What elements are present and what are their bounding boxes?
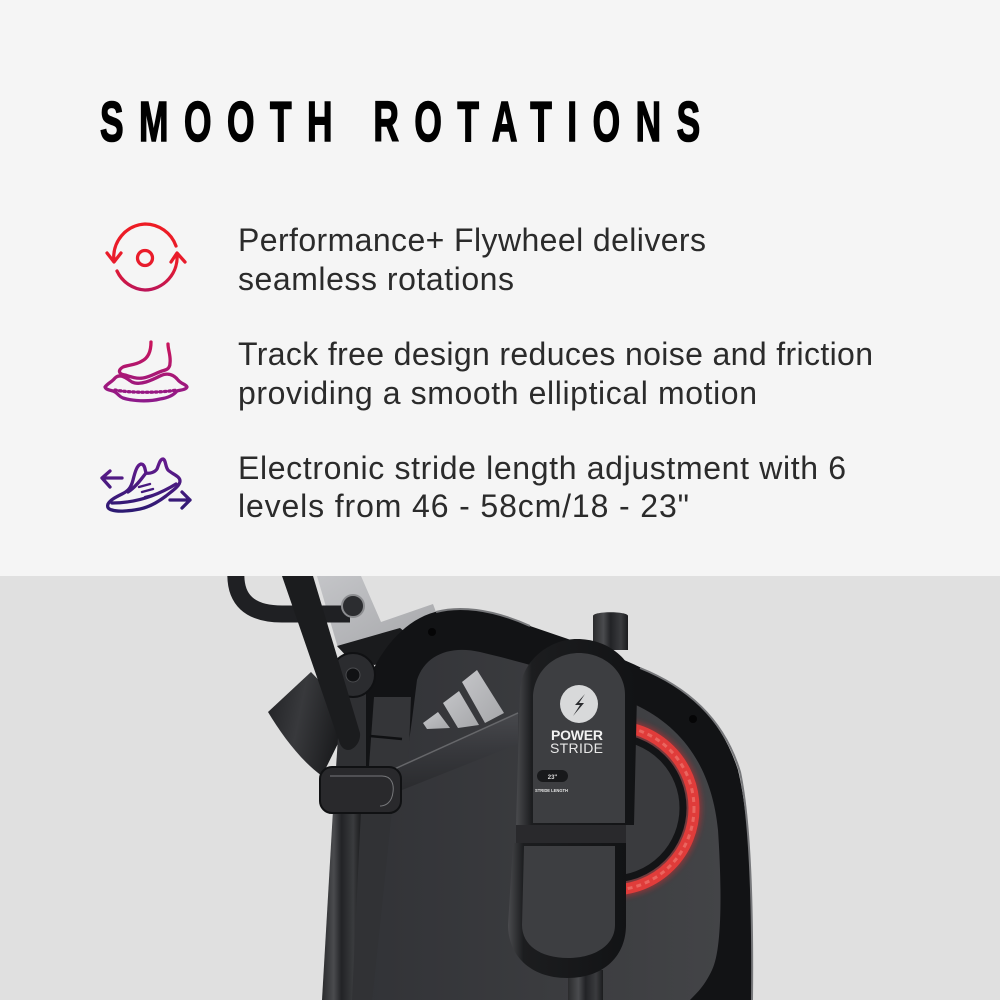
background: lower product panel (0, 576, 1000, 1000)
lower pod shell (508, 843, 626, 978)
arm joint (320, 767, 401, 813)
cup holder (268, 672, 338, 774)
power label: POWER (551, 727, 603, 743)
lower stem (568, 970, 603, 1000)
bracket lower shadow edge (337, 628, 403, 665)
text: stride length feature (238, 450, 846, 524)
display caption: STRIDE LENGTH (535, 788, 568, 793)
icon: rotation arrows (107, 224, 185, 290)
text: track free feature (238, 336, 873, 411)
arm joint highlight (330, 776, 393, 806)
lower pole (322, 810, 361, 1000)
display value: 23" (548, 775, 557, 781)
icon: shoe with arrows (102, 459, 190, 511)
lower pod face (522, 846, 615, 958)
handlebar loop (236, 570, 350, 614)
text: flywheel feature: Performance+ Flywheel delivers (238, 222, 706, 258)
swing arm highlight (390, 713, 518, 771)
pod connector (516, 825, 626, 843)
grey strip below pivot (369, 697, 411, 768)
outer housing (352, 609, 752, 1000)
display pill (537, 770, 568, 782)
feature list (102, 222, 873, 524)
text: track free feature: Track free design reduces noise and friction (238, 336, 873, 372)
upper pod face (533, 653, 625, 823)
screw holes (428, 628, 697, 723)
text: stride length feature: levels from 46 - 58cm/18 - 23" (238, 488, 689, 524)
bolt glyph (573, 694, 585, 716)
text: flywheel feature (238, 222, 706, 297)
stride length display (535, 770, 568, 793)
post top (593, 612, 628, 650)
stride label: STRIDE (550, 740, 603, 756)
icon: foot on cushion (105, 342, 187, 401)
inner side panel (365, 650, 720, 1000)
background: upper panel (0, 0, 1000, 576)
product: elliptical machine close-up (236, 570, 752, 1000)
text: track free feature: providing a smooth elliptical motion (238, 375, 757, 411)
handle mount ring (342, 595, 364, 617)
silver bracket (317, 576, 436, 648)
swing arm (402, 712, 518, 790)
handle bar (282, 576, 360, 750)
text: flywheel feature: seamless rotations (238, 261, 514, 297)
pivot bolt (346, 668, 360, 682)
upper pod shell (516, 639, 637, 825)
title: SMOOTH ROTATIONS (100, 91, 700, 154)
text: stride length feature: Electronic stride length adjustment with 6 (238, 450, 846, 486)
power stride logo (550, 685, 603, 756)
pivot cap (338, 652, 374, 698)
housing top edge highlight (436, 609, 752, 1000)
neck below pivot (336, 690, 366, 768)
side panel lower band (352, 814, 384, 1000)
flywheel light ring (626, 718, 705, 900)
dark slit (370, 736, 402, 739)
adidas logo (423, 670, 504, 729)
bolt badge (560, 685, 598, 723)
